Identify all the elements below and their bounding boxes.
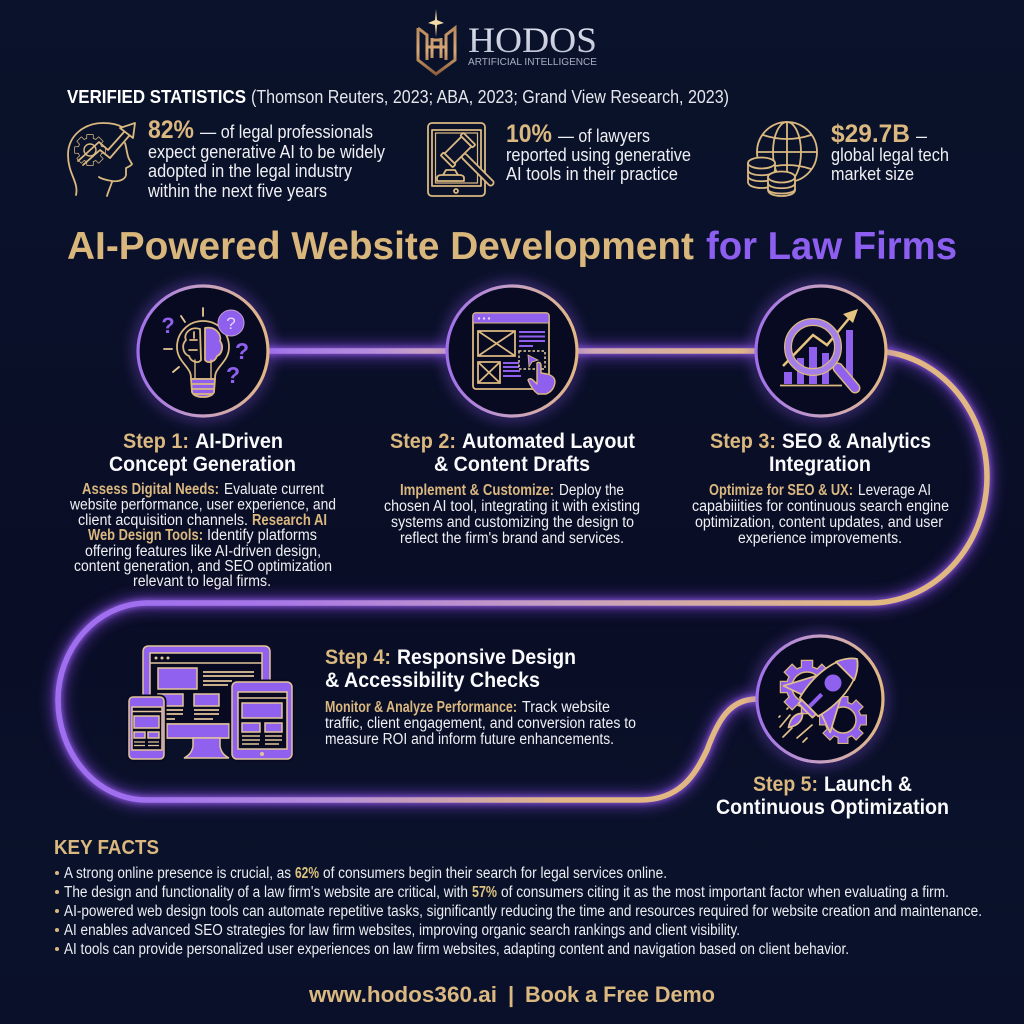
step 1 node (138, 286, 268, 416)
key facts heading: KEY FACTS (54, 836, 159, 859)
step 3 heading: Step 3: (710, 429, 776, 453)
step 1 body text: Evaluate current (224, 481, 325, 498)
stat description: AI tools in their practice (506, 164, 678, 184)
step 1 heading (109, 429, 296, 476)
icon: light bulb with brain and question marks: ? (235, 338, 249, 364)
icon: globe with coin stacks (748, 122, 817, 196)
node ring (757, 636, 883, 762)
footer call to action: Book a Free Demo (525, 982, 715, 1007)
step 2 node (447, 286, 577, 416)
key fact 2: 57% (472, 884, 497, 901)
phone (129, 697, 164, 759)
key fact 2 (64, 884, 949, 901)
heading: verified statistics: VERIFIED STATISTICS (67, 87, 246, 107)
step 1 heading: AI-Driven (195, 429, 283, 453)
step 5 heading: Launch & (824, 772, 912, 796)
step 1 body text (69, 481, 336, 590)
step 5 node (757, 636, 883, 762)
step 2 body text: reflect the firm's brand and services. (400, 530, 624, 547)
footer call to action (308, 982, 715, 1007)
step 2 heading: & Content Drafts (434, 452, 590, 476)
step 2 body text: chosen AI tool, integrating it with existing (384, 498, 640, 515)
icon: light bulb with brain and question marks: ? (161, 313, 175, 338)
heading: verified statistics: (Thomson Reuters, 2023; ABA, 2023; Grand View Research, 2023) (251, 87, 729, 107)
step 1 body text: relevant to legal firms. (133, 573, 271, 590)
icon: rocket launching over gears (765, 636, 880, 751)
key fact 4: AI enables advanced SEO strategies for law firm websites, improving organic search rankings and client visibility. (64, 922, 740, 939)
step 4 heading: Step 4: (325, 645, 391, 669)
stat description: — of lawyers (558, 126, 650, 146)
stat: 29.7 billion dollars (748, 120, 949, 196)
step 1 body text: content generation, and SEO optimization (74, 558, 332, 575)
step 2 heading (390, 429, 635, 476)
step 2 body text: systems and customizing the design to (391, 514, 634, 531)
monitor (143, 646, 270, 758)
step 4 body text (325, 699, 636, 748)
icon: bar chart, trend arrow and magnifier (780, 309, 858, 388)
key fact 5: AI tools can provide personalized user experiences on law firm websites, adapting content and navigation based on client behavior. (64, 941, 849, 958)
key fact 1: A strong online presence is crucial, as (64, 865, 291, 882)
step 2 body text: Implement & Customize: (400, 482, 554, 499)
bullet markers (55, 871, 59, 951)
icon: light bulb with brain and question marks (161, 308, 249, 397)
stat description: global legal tech (831, 145, 949, 165)
step 4 body text: traffic, client engagement, and conversion rates to (325, 715, 636, 732)
step 1 body text: Web Design Tools: (88, 527, 203, 544)
icon: light bulb with brain and question marks: ? (226, 362, 240, 388)
step 2 body text (384, 482, 640, 547)
stat description: — of legal professionals (200, 122, 373, 142)
step 5 heading: Continuous Optimization (716, 795, 949, 819)
step 5 heading (716, 772, 949, 819)
step 3 heading: Integration (769, 452, 871, 476)
logo tagline: ARTIFICIAL INTELLIGENCE (468, 57, 597, 68)
key fact 2: The design and functionality of a law firm's website are critical, with (64, 884, 468, 901)
title: AI-Powered Website Development (67, 225, 694, 268)
logo wordmark: HODOS (468, 20, 597, 60)
step 3 body text: Optimize for SEO & UX: (709, 482, 853, 499)
stat: 82 percent (68, 116, 385, 201)
stat description: expect generative AI to be widely (148, 142, 385, 162)
stat description: market size (831, 164, 914, 184)
icon: shield logo mark with star (418, 9, 455, 74)
footer call to action: www.hodos360.ai (308, 982, 497, 1007)
step 4 heading: & Accessibility Checks (325, 668, 540, 692)
step 3 body text: Leverage AI (858, 482, 931, 499)
stat value: 10% (506, 120, 552, 148)
step 4 body text: Track website (522, 699, 610, 716)
icon: light bulb with brain and question marks: ? (226, 314, 236, 333)
title: for Law Firms (706, 225, 957, 268)
step 4 heading (325, 645, 576, 692)
step 3 body text: optimization, content updates, and user (695, 514, 943, 531)
step 1 body text: website performance, user experience, and (69, 496, 336, 514)
stat description: adopted in the legal industry (148, 161, 352, 181)
step 1 body text: client acquisition channels. (78, 512, 248, 529)
stat value: $29.7B (831, 120, 910, 148)
stat description: – (916, 126, 927, 146)
step 2 heading: Automated Layout (462, 429, 635, 453)
step 1 body text: Identify platforms (207, 527, 317, 544)
connector: glowing path linking the five steps (58, 351, 987, 800)
step 4 body text: Monitor & Analyze Performance: (325, 699, 517, 716)
step 3 body text (692, 482, 949, 547)
icon: website wireframe with pointing hand (473, 313, 555, 394)
logo: Hodos Artificial Intelligence (418, 9, 597, 74)
key fact 2: of consumers citing it as the most important factor when evaluating a firm. (501, 884, 949, 901)
step 5 heading: Step 5: (753, 772, 818, 796)
step 3 body text: experience improvements. (738, 530, 902, 547)
step 2 heading: Step 2: (390, 429, 456, 453)
step 1 body text: offering features like AI-driven design, (85, 543, 321, 560)
key fact 1: of consumers begin their search for legal services online. (323, 865, 667, 882)
step 1 body text: Assess Digital Needs: (82, 481, 219, 498)
stat description (506, 126, 691, 184)
stat description (147, 122, 385, 201)
step 4 body text: measure ROI and inform future enhancements. (325, 731, 614, 748)
stat: 10 percent (428, 120, 691, 196)
footer call to action: | (508, 982, 514, 1007)
step 2 body text: Deploy the (559, 482, 624, 499)
heading: verified statistics (67, 87, 729, 107)
stat value: 82% (148, 116, 194, 144)
key facts section (54, 836, 982, 958)
node ring (138, 286, 268, 416)
step 1 body text: Research AI (252, 512, 327, 529)
step 3 node (756, 286, 886, 416)
step 3 body text: capabiiities for continuous search engine (692, 498, 949, 515)
icon: responsive devices (monitor, tablet, phone) (129, 646, 292, 759)
step 3 heading: SEO & Analytics (782, 429, 931, 453)
icon: head with gear and rising arrow (68, 123, 135, 196)
key fact 1 (64, 865, 667, 882)
step 1 heading: Step 1: (123, 429, 189, 453)
step 4 heading: Responsive Design (397, 645, 576, 669)
icon: tablet with gavel (428, 123, 504, 196)
stat description: reported using generative (506, 145, 691, 165)
stat description: within the next five years (147, 181, 327, 201)
tablet (232, 682, 292, 759)
node ring (756, 286, 886, 416)
key fact 1: 62% (295, 865, 319, 882)
step 3 heading (710, 429, 931, 476)
node ring (447, 286, 577, 416)
step 1 heading: Concept Generation (109, 452, 296, 476)
stat description (831, 126, 949, 184)
